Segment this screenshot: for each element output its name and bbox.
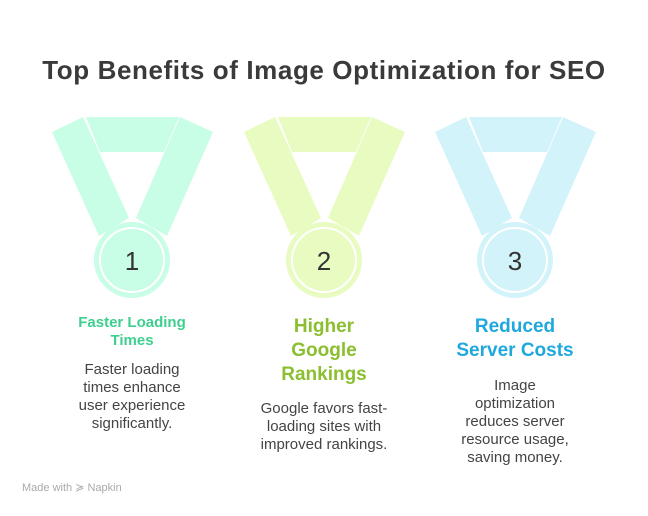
text 3: resource usage,: [461, 431, 569, 448]
footer: Made with ≽ Napkin: [22, 482, 122, 494]
title: Top Benefits of Image Optimization for SEO: [42, 55, 606, 85]
medal 3: [435, 117, 596, 298]
text 3: reduces server: [465, 413, 565, 430]
heading 2: Google: [291, 340, 357, 361]
heading 1: Times: [110, 332, 154, 349]
text 3: Image: [494, 377, 536, 394]
medal 2: 2: [317, 246, 331, 276]
text 1: [79, 361, 185, 432]
heading 3: Reduced: [475, 316, 555, 337]
medal 1: [52, 117, 213, 298]
text 1: significantly.: [92, 415, 172, 432]
medal 3: 3: [508, 246, 522, 276]
text 2: loading sites with: [267, 418, 381, 435]
text 3: optimization: [475, 395, 555, 412]
heading 2: Rankings: [281, 364, 367, 385]
text 1: user experience: [79, 397, 185, 414]
text 3: saving money.: [467, 449, 563, 466]
text 1: times enhance: [83, 379, 181, 396]
text 2: improved rankings.: [261, 436, 387, 453]
text 2: Google favors fast-: [261, 400, 387, 417]
text 3: [461, 377, 569, 466]
medal 1: 1: [125, 246, 139, 276]
text 1: Faster loading: [84, 361, 180, 378]
heading 2: [281, 316, 367, 385]
medal 2: [244, 117, 405, 298]
heading 3: Server Costs: [456, 340, 574, 361]
heading 2: Higher: [294, 316, 354, 337]
heading 1: Faster Loading: [78, 314, 186, 331]
text 2: [261, 400, 387, 453]
heading 3: [456, 316, 574, 361]
heading 1: [78, 314, 186, 349]
